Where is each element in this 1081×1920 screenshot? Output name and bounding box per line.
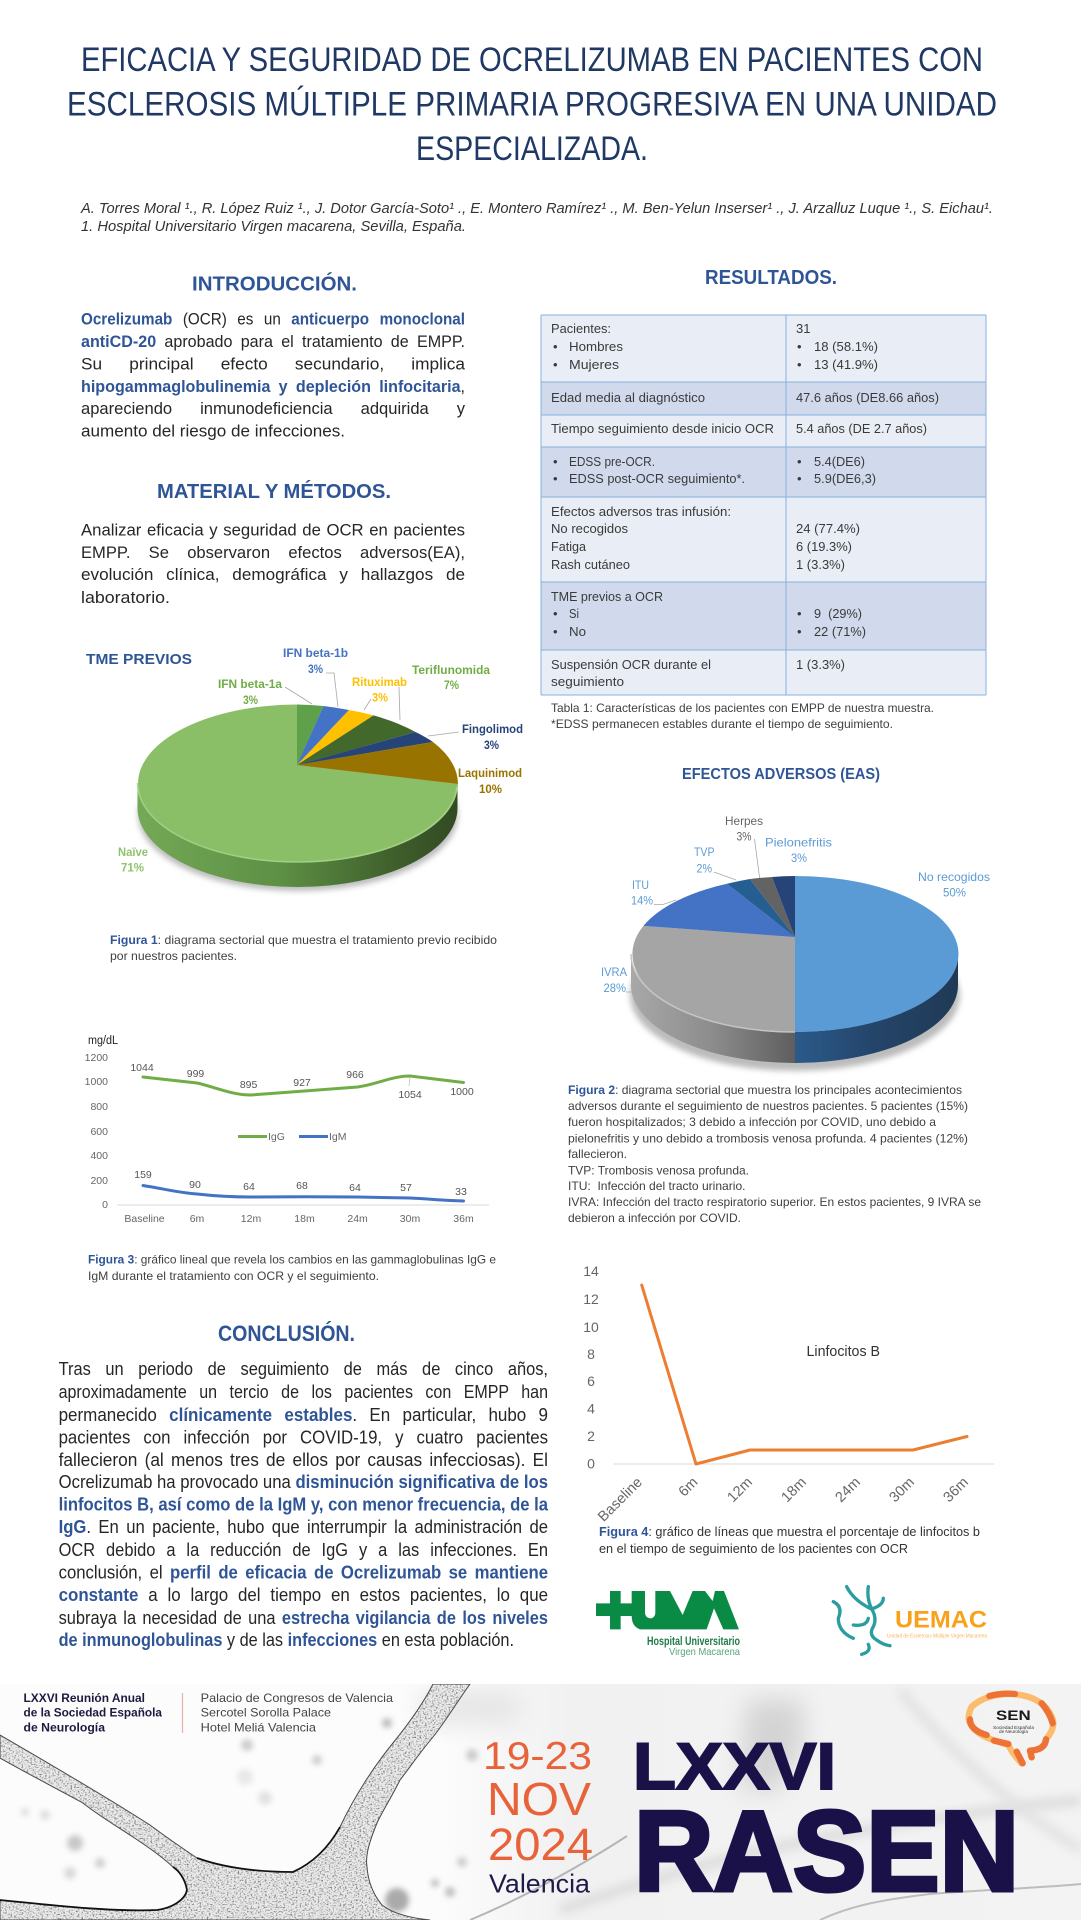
text block: conclusion paragraph: Tras un periodo de seguimiento de más de cinco años, bbox=[59, 1359, 548, 1379]
table: patient characteristics: Si bbox=[569, 606, 579, 621]
slice labels: Naïve bbox=[118, 847, 148, 859]
slice labels: 50% bbox=[943, 886, 966, 900]
heading: material y métodos: MATERIAL Y MÉTODOS. bbox=[157, 480, 391, 503]
heading: efectos adversos: EFECTOS ADVERSOS (EAS) bbox=[682, 766, 880, 783]
congress text: Hotel Meliá Valencia bbox=[201, 1721, 316, 1735]
slice labels: 3% bbox=[243, 695, 258, 707]
logo: hospital universitario virgen macarena: Virgen Macarena bbox=[669, 1646, 740, 1658]
x axis labels: 12m bbox=[241, 1213, 261, 1225]
caption: figura 4: en el tiempo de seguimiento de los pacientes con OCR bbox=[599, 1542, 908, 1556]
table: patient characteristics: Pacientes: bbox=[551, 321, 611, 336]
data labels: 64 bbox=[243, 1181, 255, 1193]
slice labels: 14% bbox=[631, 894, 653, 908]
data labels: 999 bbox=[187, 1068, 204, 1080]
table: patient characteristics: seguimiento bbox=[551, 674, 624, 689]
data labels bbox=[130, 1062, 474, 1198]
thin fibres bbox=[470, 1836, 1081, 1920]
table: patient characteristics: 22 (71%) bbox=[814, 624, 866, 639]
x axis labels bbox=[595, 1475, 972, 1525]
blurred background neurons bbox=[21, 1684, 1081, 1920]
text block: introduction paragraph: apareciendo inmunodeficiencia adquirida y bbox=[81, 399, 465, 418]
congress text bbox=[24, 1691, 393, 1735]
logo: SEN: SEN bbox=[996, 1707, 1031, 1723]
legend: IgG bbox=[268, 1131, 285, 1143]
table: patient characteristics: • bbox=[553, 606, 558, 621]
table: patient characteristics: • bbox=[797, 339, 802, 354]
caption: figura 2: fueron hospitalizados; 3 debido a infección por COVID, uno debido a bbox=[568, 1115, 936, 1129]
table: patient characteristics: 5.9(DE6,3) bbox=[814, 471, 876, 486]
table: patient characteristics: 24 (77.4%) bbox=[796, 521, 860, 536]
table: patient characteristics: No bbox=[569, 624, 586, 639]
table: patient characteristics: Fatiga bbox=[551, 539, 587, 554]
x axis labels: 30m bbox=[887, 1475, 918, 1506]
data labels: 68 bbox=[296, 1180, 308, 1192]
IgM line bbox=[143, 1186, 464, 1201]
table: patient characteristics: • bbox=[553, 471, 558, 486]
slice labels bbox=[118, 648, 523, 874]
y axis labels: 8 bbox=[587, 1346, 595, 1362]
table: patient characteristics: • bbox=[797, 454, 802, 469]
text block: conclusion paragraph: de inmunoglobulinas y de las infecciones en esta población. bbox=[59, 1630, 514, 1650]
x axis labels: 36m bbox=[453, 1213, 474, 1225]
data labels: 895 bbox=[240, 1079, 258, 1091]
logo: SEN: Sociedad Española bbox=[993, 1725, 1035, 1730]
slice labels: 3% bbox=[372, 692, 388, 704]
y axis labels: 14 bbox=[583, 1263, 599, 1279]
y axis labels bbox=[583, 1263, 599, 1472]
text block: conclusion paragraph: Ocrelizumab ha provocado una disminución significativa de los bbox=[59, 1472, 548, 1492]
y axis labels bbox=[85, 1052, 108, 1211]
logo: SEN bbox=[969, 1694, 1053, 1763]
logo: hospital universitario virgen macarena bbox=[596, 1591, 740, 1658]
slice labels: IFN beta-1b bbox=[283, 648, 348, 660]
caption: figura 2: TVP: Trombosis venosa profunda. bbox=[568, 1164, 749, 1178]
text block: conclusion paragraph: conclusión, el perfil de eficacia de Ocrelizumab se mantiene bbox=[59, 1562, 548, 1582]
slice labels: Laquinimod bbox=[458, 768, 522, 780]
caption: figura 2: pielonefritis y uno debido a trombosis venosa profunda. 4 pacientes (12%) bbox=[568, 1131, 968, 1145]
data labels: 1000 bbox=[450, 1086, 474, 1098]
text block: methods paragraph: EMPP. Se observaron efectos adversos(EA), bbox=[81, 543, 465, 562]
text block: introduction paragraph: hipogammaglobulinemia y depleción linfocitaria, bbox=[81, 377, 465, 396]
x axis labels: 24m bbox=[833, 1475, 864, 1506]
text block: methods paragraph: Analizar eficacia y seguridad de OCR en pacientes bbox=[81, 520, 465, 540]
slice labels: 10% bbox=[479, 784, 502, 796]
panel: introduction bbox=[81, 272, 466, 441]
x axis labels: Baseline bbox=[124, 1213, 165, 1225]
text block: introduction paragraph bbox=[81, 310, 466, 441]
table: patient characteristics: 5.4 años (DE 2.7 años) bbox=[796, 421, 927, 436]
caption: figura 4: Figura 4: gráfico de líneas que muestra el porcentaje de linfocitos b bbox=[599, 1525, 980, 1539]
slice labels: Herpes bbox=[725, 814, 763, 828]
leader lines bbox=[285, 673, 459, 736]
dates: 2024 bbox=[488, 1819, 593, 1870]
dates: 19-23 bbox=[483, 1735, 592, 1778]
y axis labels: 0 bbox=[587, 1456, 595, 1472]
slice labels: 71% bbox=[121, 862, 144, 874]
dates bbox=[486, 1742, 592, 1893]
chart title: Linfocitos B bbox=[806, 1344, 880, 1360]
leader lines bbox=[626, 839, 760, 992]
caption: figura 3 bbox=[88, 1252, 496, 1283]
y axis labels: 800 bbox=[90, 1101, 108, 1113]
caption: figura 4 bbox=[599, 1525, 980, 1556]
table: patient characteristics: 9 (29%) bbox=[814, 606, 862, 621]
slice labels: 28% bbox=[604, 981, 626, 995]
panel: methods bbox=[81, 480, 465, 607]
table: patient characteristics: 5.4(DE6) bbox=[814, 454, 865, 469]
logo: uemac bbox=[833, 1587, 987, 1654]
table: patient characteristics: Efectos adversos tras infusión: bbox=[551, 504, 731, 519]
text block: conclusion paragraph: fallecieron (al menos tres de ellos por causas infecciosas). El bbox=[59, 1450, 548, 1470]
table: patient characteristics: • bbox=[553, 339, 558, 354]
logo: uemac: Unidad de Esclerosis Múltiple Virgen Macarena bbox=[887, 1634, 987, 1640]
table: patient characteristics: Edad media al diagnóstico bbox=[551, 390, 705, 405]
legend: IgM bbox=[329, 1131, 347, 1143]
neuron bbox=[0, 1684, 480, 1920]
y axis labels: 400 bbox=[90, 1150, 108, 1162]
slice labels bbox=[601, 814, 990, 995]
table: patient characteristics: 13 (41.9%) bbox=[814, 357, 878, 372]
x axis labels bbox=[124, 1213, 474, 1225]
slice labels: No recogidos bbox=[918, 870, 990, 884]
table: patient characteristics: TME previos a OCR bbox=[551, 589, 663, 604]
authors and affiliation bbox=[80, 200, 993, 235]
caption: figura 3: Figura 3: gráfico lineal que revela los cambios en las gammaglobulinas IgG e bbox=[88, 1252, 496, 1266]
text block: conclusion paragraph: permanecido clínicamente estables. En particular, hubo 9 bbox=[59, 1405, 548, 1425]
x axis labels: Baseline bbox=[595, 1475, 646, 1525]
congress name: LXXVI bbox=[633, 1729, 836, 1803]
table: patient characteristics: Tiempo seguimiento desde inicio OCR bbox=[551, 421, 774, 436]
slice labels: 3% bbox=[791, 851, 807, 865]
slice labels: 7% bbox=[444, 680, 459, 692]
data labels: 33 bbox=[455, 1186, 467, 1198]
table: patient characteristics: Hombres bbox=[569, 339, 623, 354]
table: patient characteristics: 6 (19.3%) bbox=[796, 539, 852, 554]
y axis labels: 12 bbox=[583, 1291, 599, 1307]
data labels: 64 bbox=[349, 1182, 361, 1194]
data labels: 927 bbox=[293, 1077, 311, 1089]
table: patient characteristics: • bbox=[553, 454, 558, 469]
x axis labels: 36m bbox=[941, 1475, 972, 1506]
y axis labels: 0 bbox=[102, 1199, 108, 1211]
text block: conclusion paragraph: constante a lo largo del tiempo en estos pacientes, lo que bbox=[59, 1585, 548, 1605]
y axis labels: 6 bbox=[587, 1373, 595, 1389]
text block: conclusion paragraph: pacientes con infección por COVID-19, y cuatro pacientes bbox=[59, 1428, 548, 1448]
caption: figura 2: fallecieron. bbox=[568, 1147, 627, 1161]
banner: LXXVI RASEN congress bbox=[0, 1684, 1081, 1920]
x axis labels: 12m bbox=[725, 1475, 756, 1506]
slice labels: IFN beta-1a bbox=[218, 679, 283, 691]
caption: figura 2: adversos durante el seguimiento de nuestros pacientes. 5 pacientes (15%) bbox=[568, 1099, 968, 1113]
title: ESPECIALIZADA. bbox=[416, 130, 648, 168]
caption: figura 1: Figura 1: diagrama sectorial que muestra el tratamiento previo recibido bbox=[110, 933, 497, 947]
table: patient characteristics: 18 (58.1%) bbox=[814, 339, 878, 354]
orange line bbox=[642, 1285, 967, 1464]
table: patient characteristics: • bbox=[797, 624, 802, 639]
text block: methods paragraph: laboratorio. bbox=[81, 588, 170, 607]
y axis labels: 2 bbox=[587, 1428, 595, 1444]
text block: methods paragraph: evolución clínica, demográfica y hallazgos de bbox=[81, 565, 465, 584]
heading: tme previos: TME PREVIOS bbox=[86, 651, 192, 668]
heading: conclusión: CONCLUSIÓN. bbox=[218, 1321, 355, 1346]
x axis labels: 18m bbox=[779, 1475, 810, 1506]
table: patient characteristics: • bbox=[553, 624, 558, 639]
caption: figura 2: Figura 2: diagrama sectorial que muestra los principales acontecimientos bbox=[568, 1083, 962, 1097]
slice labels: Rituximab bbox=[352, 677, 407, 689]
slice labels: TVP bbox=[694, 845, 714, 859]
pie chart: previous treatments bbox=[118, 648, 523, 891]
table: patient characteristics: EDSS pre-OCR. bbox=[569, 454, 655, 469]
text block: conclusion paragraph: aproximadamente un tercio de los pacientes con EMPP han bbox=[59, 1382, 548, 1402]
text block: conclusion paragraph: linfocitos B, así como de la IgM y, con menor frecuencia, de la bbox=[59, 1495, 549, 1515]
slice labels: 3% bbox=[484, 740, 499, 752]
slice labels: IVRA bbox=[601, 965, 627, 979]
data labels: 57 bbox=[400, 1182, 412, 1194]
x axis labels: 6m bbox=[676, 1475, 701, 1500]
slice labels: Pielonefritis bbox=[765, 836, 832, 850]
line chart: linfocitos B bbox=[583, 1263, 994, 1525]
table: patient characteristics: Suspensión OCR durante el bbox=[551, 657, 711, 672]
table: patient characteristics: 47.6 años (DE8.66 años) bbox=[796, 390, 939, 405]
caption: figura 2: ITU: Infección del tracto urinario. bbox=[568, 1179, 746, 1193]
table: patient characteristics: Mujeres bbox=[569, 357, 620, 372]
table caption: *EDSS permanecen estables durante el tiempo de seguimiento. bbox=[551, 717, 893, 731]
data labels: 159 bbox=[134, 1169, 152, 1181]
IgG line bbox=[143, 1076, 464, 1095]
y axis labels: 200 bbox=[90, 1175, 108, 1187]
panel: conclusion bbox=[59, 1321, 549, 1650]
authors and affiliation: A. Torres Moral ¹., R. López Ruiz ¹., J. Dotor García-Soto¹ ., E. Montero Ramírez¹ ., M. Ben-Yelun Inserser¹ ., J. Arzalluz Luque ¹., S. Eichau¹. bbox=[80, 200, 993, 217]
table: patient characteristics: • bbox=[797, 357, 802, 372]
slice labels: Fingolimod bbox=[462, 724, 523, 736]
heading: resultados: RESULTADOS. bbox=[705, 267, 837, 289]
data labels: 90 bbox=[189, 1179, 201, 1191]
x axis labels: 24m bbox=[347, 1213, 368, 1225]
dates: NOV bbox=[487, 1773, 591, 1825]
congress text: de Neurología bbox=[24, 1721, 105, 1735]
y axis labels: 1200 bbox=[85, 1052, 108, 1064]
y axis labels: 600 bbox=[90, 1126, 108, 1138]
table: patient characteristics: EDSS post-OCR seguimiento*. bbox=[569, 471, 745, 486]
text block: introduction paragraph: Su principal efecto secundario, implica bbox=[81, 354, 466, 373]
text block: conclusion paragraph: subraya la necesidad de una estrecha vigilancia de los niveles bbox=[59, 1608, 548, 1628]
text block: methods paragraph bbox=[81, 520, 465, 607]
logo: uemac: UEMAC bbox=[895, 1607, 987, 1634]
table: patient characteristics bbox=[541, 315, 986, 695]
congress text: LXXVI Reunión Anual bbox=[24, 1691, 145, 1705]
dates: Valencia bbox=[489, 1869, 591, 1899]
table caption: Tabla 1: Características de los pacientes con EMPP de nuestra muestra. bbox=[551, 701, 934, 715]
table: patient characteristics: No recogidos bbox=[551, 521, 628, 536]
slice labels: 2% bbox=[696, 861, 712, 875]
line chart: IgG and IgM bbox=[85, 1035, 489, 1225]
data labels: 966 bbox=[346, 1069, 364, 1081]
authors and affiliation: 1. Hospital Universitario Virgen macarena, Sevilla, España. bbox=[81, 218, 466, 235]
legend bbox=[238, 1131, 347, 1143]
slice labels: ITU bbox=[632, 878, 649, 892]
title bbox=[67, 41, 997, 168]
caption: figura 1: por nuestros pacientes. bbox=[110, 949, 237, 963]
table: patient characteristics: 1 (3.3%) bbox=[796, 657, 845, 672]
slice labels: 3% bbox=[736, 830, 752, 844]
congress name bbox=[636, 1742, 1014, 1894]
line chart: IgG and IgM: mg/dL bbox=[88, 1035, 119, 1047]
congress text: Sercotel Sorolla Palace bbox=[201, 1706, 331, 1720]
slice labels: Teriflunomida bbox=[412, 665, 491, 677]
text block: conclusion paragraph: IgG. En un paciente, hubo que interrumpir la administración de bbox=[59, 1517, 548, 1537]
table: patient characteristics: Rash cutáneo bbox=[551, 557, 630, 572]
data labels: 1054 bbox=[398, 1089, 422, 1101]
caption: figura 1 bbox=[110, 933, 497, 963]
text block: introduction paragraph: aumento del riesgo de infecciones. bbox=[81, 422, 345, 441]
y axis labels: 10 bbox=[583, 1319, 599, 1335]
caption: figura 2: debieron a infección por COVID. bbox=[568, 1211, 741, 1225]
caption: figura 3: IgM durante el tratamiento con OCR y el seguimiento. bbox=[88, 1269, 379, 1283]
logo: SEN: de Neurología bbox=[999, 1729, 1028, 1734]
y axis labels: 4 bbox=[587, 1400, 595, 1416]
x axis labels: 6m bbox=[190, 1213, 205, 1225]
table: patient characteristics: • bbox=[553, 357, 558, 372]
caption: figura 2: IVRA: Infección del tracto respiratorio superior. En estos pacientes, 9 IVRA se bbox=[568, 1195, 981, 1209]
heading: introducción: INTRODUCCIÓN. bbox=[192, 272, 357, 296]
table: patient characteristics: 31 bbox=[796, 321, 810, 336]
y axis labels: 1000 bbox=[85, 1076, 108, 1088]
text block: conclusion paragraph: OCR debido a la reducción de IgG y a las infecciones. En bbox=[59, 1540, 548, 1560]
slice labels: 3% bbox=[308, 664, 323, 676]
data labels: 1044 bbox=[130, 1062, 154, 1074]
table: patient characteristics: • bbox=[797, 471, 802, 486]
text block: conclusion paragraph bbox=[59, 1359, 549, 1650]
congress text: Palacio de Congresos de Valencia bbox=[201, 1691, 393, 1705]
text block: introduction paragraph: antiCD-20 aprobado para el tratamiento de EMPP. bbox=[81, 332, 465, 351]
table caption bbox=[551, 701, 934, 731]
pie chart: adverse events bbox=[601, 814, 990, 1071]
caption: figura 2 bbox=[568, 1083, 981, 1225]
table: patient characteristics: • bbox=[797, 606, 802, 621]
logo: hospital universitario virgen macarena: Hospital Universitario bbox=[647, 1636, 740, 1648]
x axis labels: 30m bbox=[400, 1213, 420, 1225]
table: patient characteristics: 1 (3.3%) bbox=[796, 557, 845, 572]
congress name: RASEN bbox=[634, 1788, 1019, 1916]
congress text: de la Sociedad Española bbox=[24, 1706, 162, 1720]
x axis labels: 18m bbox=[294, 1213, 315, 1225]
text block: introduction paragraph: Ocrelizumab (OCR) es un anticuerpo monoclonal bbox=[81, 310, 465, 328]
